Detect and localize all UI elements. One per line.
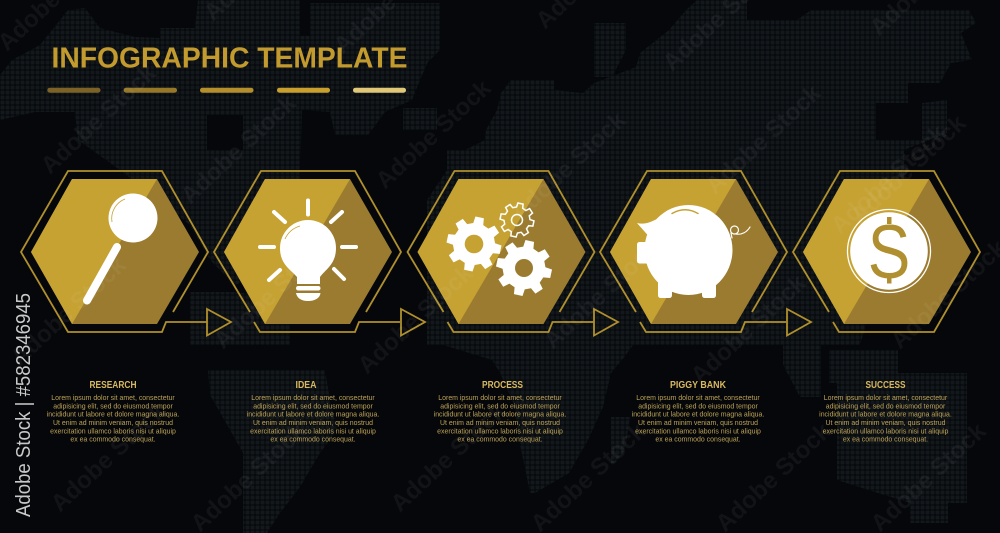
- text block: success: ex ea commodo consequat.: [843, 437, 928, 444]
- vertical stock id text: Adobe Stock | #582346945: [13, 293, 35, 517]
- text block: idea: ex ea commodo consequat.: [270, 437, 356, 444]
- arrow 1: [207, 309, 231, 336]
- text block: success: exercitation ullamco laboris nisi ut aliquip: [823, 428, 948, 435]
- text block: piggy bank: exercitation ullamco laboris nisi ut aliquip: [635, 428, 761, 435]
- stock watermarks: Adobe Stock: [386, 397, 512, 517]
- text block: success: Lorem ipsum dolor sit amet, consectetur: [824, 395, 948, 402]
- stock watermarks: Adobe Stock: [371, 74, 497, 194]
- stock watermarks: Adobe Stock: [209, 234, 335, 354]
- text block: process: adipisicing elit, sed do eiusmod tempor: [440, 403, 560, 410]
- stock watermarks: Adobe Stock: [506, 106, 632, 226]
- icon: piggy bank: [637, 205, 750, 298]
- text block: success: SUCCESS: [866, 379, 906, 391]
- stock watermarks: Adobe Stock: [353, 259, 479, 379]
- title divider bars: [47, 88, 406, 93]
- text block: process: [434, 379, 566, 444]
- step 3: process hexagon: [408, 171, 618, 336]
- text block: success: adipisicing elit, sed do eiusmod tempor: [826, 403, 946, 410]
- text block: process: Lorem ipsum dolor sit amet, consectetur: [438, 395, 562, 402]
- text block: piggy bank: adipisicing elit, sed do eiusmod tempor: [638, 403, 758, 410]
- step 1: research hexagon: [21, 171, 231, 336]
- stock watermarks: Adobe Stock: [686, 269, 812, 389]
- icon: gears: [442, 200, 557, 301]
- icon: dollar coin: S: [868, 209, 910, 294]
- step 4: piggy bank hexagon: [600, 171, 811, 336]
- text block: idea: IDEA: [296, 379, 317, 391]
- stock watermarks: Adobe Stock: [6, 251, 132, 371]
- step 5: success hexagon: [793, 171, 980, 332]
- text block: piggy bank: [632, 379, 764, 444]
- icon: light bulb: [260, 200, 356, 301]
- text block: process: PROCESS: [482, 379, 523, 391]
- text block: idea: adipisicing elit, sed do eiusmod tempor: [253, 403, 373, 410]
- text block: research: RESEARCH: [90, 379, 136, 391]
- arrow 2: [401, 309, 425, 336]
- text block: idea: Ut enim ad minim veniam, quis nostrud: [253, 420, 373, 427]
- icon: magnifying glass: [87, 194, 158, 300]
- title: INFOGRAPHIC TEMPLATE: [52, 42, 408, 74]
- text block: research: Lorem ipsum dolor sit amet, consectetur: [51, 395, 175, 402]
- text block: piggy bank: Lorem ipsum dolor sit amet, consectetur: [636, 395, 760, 402]
- text block: idea: Lorem ipsum dolor sit amet, consectetur: [251, 395, 375, 402]
- text block: process: exercitation ullamco laboris nisi ut aliquip: [437, 428, 563, 435]
- text block: research: incididunt ut labore et dolore magna aliqua.: [47, 412, 179, 419]
- text block: piggy bank: Ut enim ad minim veniam, quis nostrud: [638, 420, 758, 427]
- stock watermarks: Adobe Stock: [36, 59, 162, 179]
- text block: success: incididunt ut labore et dolore magna aliqua.: [819, 412, 952, 419]
- text block: research: exercitation ullamco laboris nisi ut aliquip: [50, 428, 176, 435]
- text block: process: ex ea commodo consequat.: [457, 437, 543, 444]
- text block: research: [47, 379, 179, 444]
- stock watermarks: Adobe Stock: [846, 109, 972, 229]
- text block: process: Ut enim ad minim veniam, quis nostrud: [440, 420, 560, 427]
- text block: success: [819, 379, 952, 444]
- step 2: idea hexagon: [214, 171, 425, 336]
- icon: dollar coin: [848, 209, 930, 294]
- text block: success: Ut enim ad minim veniam, quis nostrud: [826, 420, 946, 427]
- text block: piggy bank: ex ea commodo consequat.: [655, 437, 741, 444]
- text block: piggy bank: PIGGY BANK: [670, 379, 726, 391]
- stock watermarks: Adobe Stock: [826, 119, 952, 239]
- text block: research: ex ea commodo consequat.: [70, 437, 156, 444]
- text block: process: incididunt ut labore et dolore magna aliqua.: [434, 412, 566, 419]
- text block: research: Ut enim ad minim veniam, quis nostrud: [53, 420, 173, 427]
- stock watermarks: Adobe Stock: [46, 397, 172, 517]
- stock watermarks: Adobe Stock: [539, 234, 665, 354]
- text block: piggy bank: incididunt ut labore et dolore magna aliqua.: [632, 412, 764, 419]
- stock watermarks: Adobe Stock: [176, 89, 302, 209]
- text block: idea: incididunt ut labore et dolore magna aliqua.: [247, 412, 379, 419]
- arrow 3: [594, 309, 618, 336]
- arrow 4: [787, 309, 811, 336]
- stock watermarks: Adobe Stock: [701, 79, 827, 199]
- text block: research: adipisicing elit, sed do eiusmod tempor: [53, 403, 173, 410]
- text block: idea: exercitation ullamco laboris nisi ut aliquip: [250, 428, 376, 435]
- text block: idea: [247, 379, 379, 444]
